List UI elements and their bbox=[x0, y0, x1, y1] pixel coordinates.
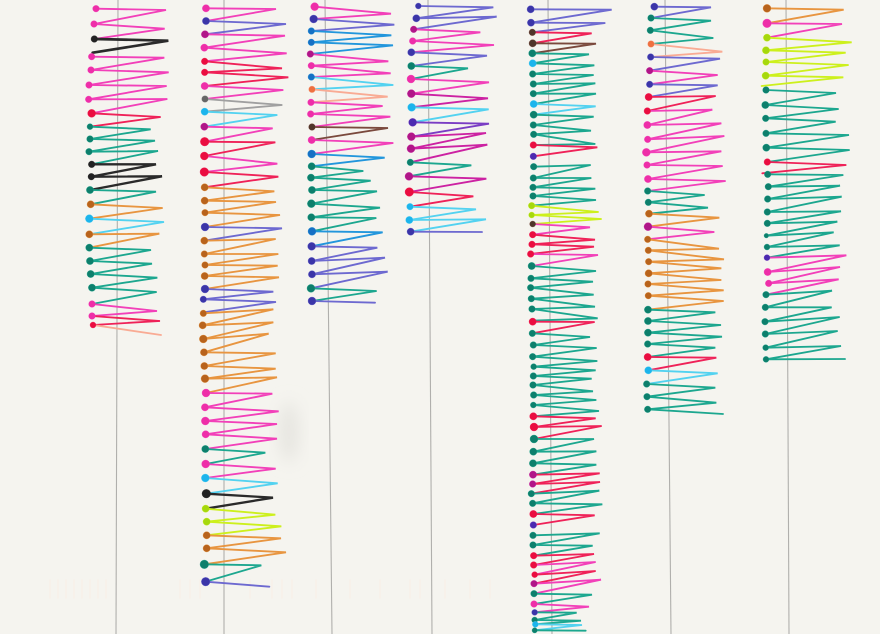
column 6 zigzag bbox=[642, 3, 726, 414]
column 5 zigzag, upper part bbox=[527, 6, 612, 321]
column 2 zigzag, upper part bbox=[200, 5, 288, 312]
vertical guide lines bbox=[116, 0, 789, 634]
column 1 zigzag bbox=[85, 5, 169, 335]
paper smudge bbox=[279, 402, 299, 462]
column 5 zigzag, lower part bbox=[528, 318, 602, 633]
column 7 zigzag bbox=[762, 4, 852, 362]
column 3 zigzag bbox=[307, 3, 394, 305]
column 4 zigzag bbox=[405, 3, 497, 235]
faint ghost marks along the bottom bbox=[50, 580, 490, 598]
column 2 zigzag, lower part bbox=[199, 309, 286, 587]
